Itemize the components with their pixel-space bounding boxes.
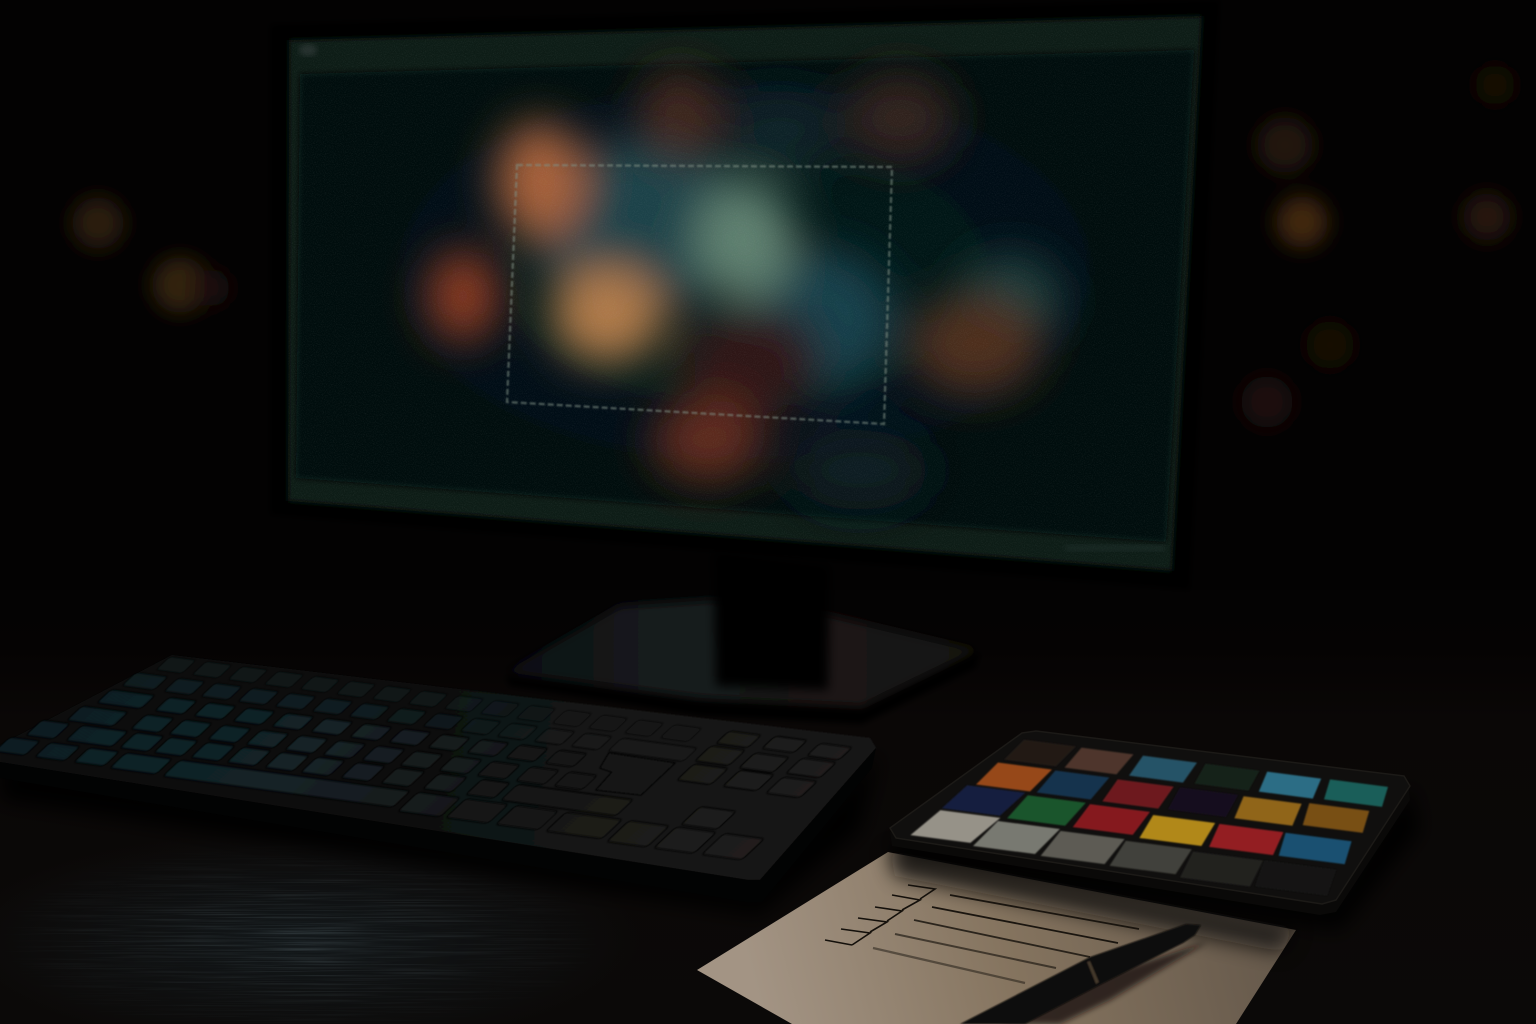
bokeh lights right bbox=[1241, 65, 1515, 428]
pen body bbox=[960, 924, 1201, 1024]
enter key bbox=[596, 753, 675, 795]
status bar right bbox=[1065, 545, 1165, 551]
row 1 keys bbox=[156, 657, 702, 742]
row 4 keys bbox=[67, 706, 597, 790]
window controls top left bbox=[299, 44, 317, 56]
checkbox marks bbox=[825, 885, 935, 945]
colour chart bbox=[890, 731, 1420, 930]
pen shadow bbox=[1000, 942, 1207, 1024]
cool sheen on desk bbox=[0, 830, 640, 1024]
screen frame band bbox=[288, 16, 1202, 571]
pen ring bbox=[1087, 961, 1099, 984]
keyboard shadow bbox=[0, 750, 880, 915]
monitor housing bbox=[270, 0, 1220, 590]
stand neck bbox=[713, 550, 830, 690]
row 1 patches bbox=[1004, 740, 1388, 807]
row 2 patches bbox=[976, 762, 1369, 833]
screen grain bbox=[288, 16, 1202, 571]
text lines bbox=[873, 895, 1139, 983]
row 2 keys bbox=[122, 672, 697, 761]
row 3 patches bbox=[942, 785, 1352, 864]
colour patches bbox=[910, 740, 1388, 896]
numpad keys bbox=[634, 730, 854, 835]
stand front edge bbox=[505, 652, 980, 724]
note paper bbox=[697, 850, 1296, 1024]
keyboard body bbox=[0, 655, 876, 880]
row 3 keys bbox=[97, 690, 587, 767]
screen canvas bbox=[296, 50, 1194, 542]
colour blobs on screen bbox=[427, 69, 1062, 510]
desk surface bbox=[0, 841, 639, 1024]
monitor stand bbox=[505, 550, 980, 724]
key grid bbox=[0, 646, 861, 860]
keyboard front edge bbox=[0, 748, 876, 902]
wood grain highlight bbox=[74, 877, 494, 1015]
chart shadow on paper bbox=[888, 850, 1296, 952]
dashed selection rectangle bbox=[507, 165, 892, 424]
row 5 keys bbox=[25, 720, 633, 816]
chart top face bbox=[890, 731, 1410, 904]
chart shadow bbox=[890, 785, 1420, 930]
row 4 patches bbox=[910, 810, 1336, 896]
pen bbox=[960, 924, 1201, 1024]
stand base bbox=[505, 600, 978, 706]
bottom row keys with spacebar bbox=[0, 737, 764, 860]
chart side bbox=[890, 780, 1410, 915]
keyboard bbox=[0, 646, 880, 915]
bokeh lights left bbox=[72, 197, 230, 313]
monitor bbox=[270, 0, 1220, 590]
